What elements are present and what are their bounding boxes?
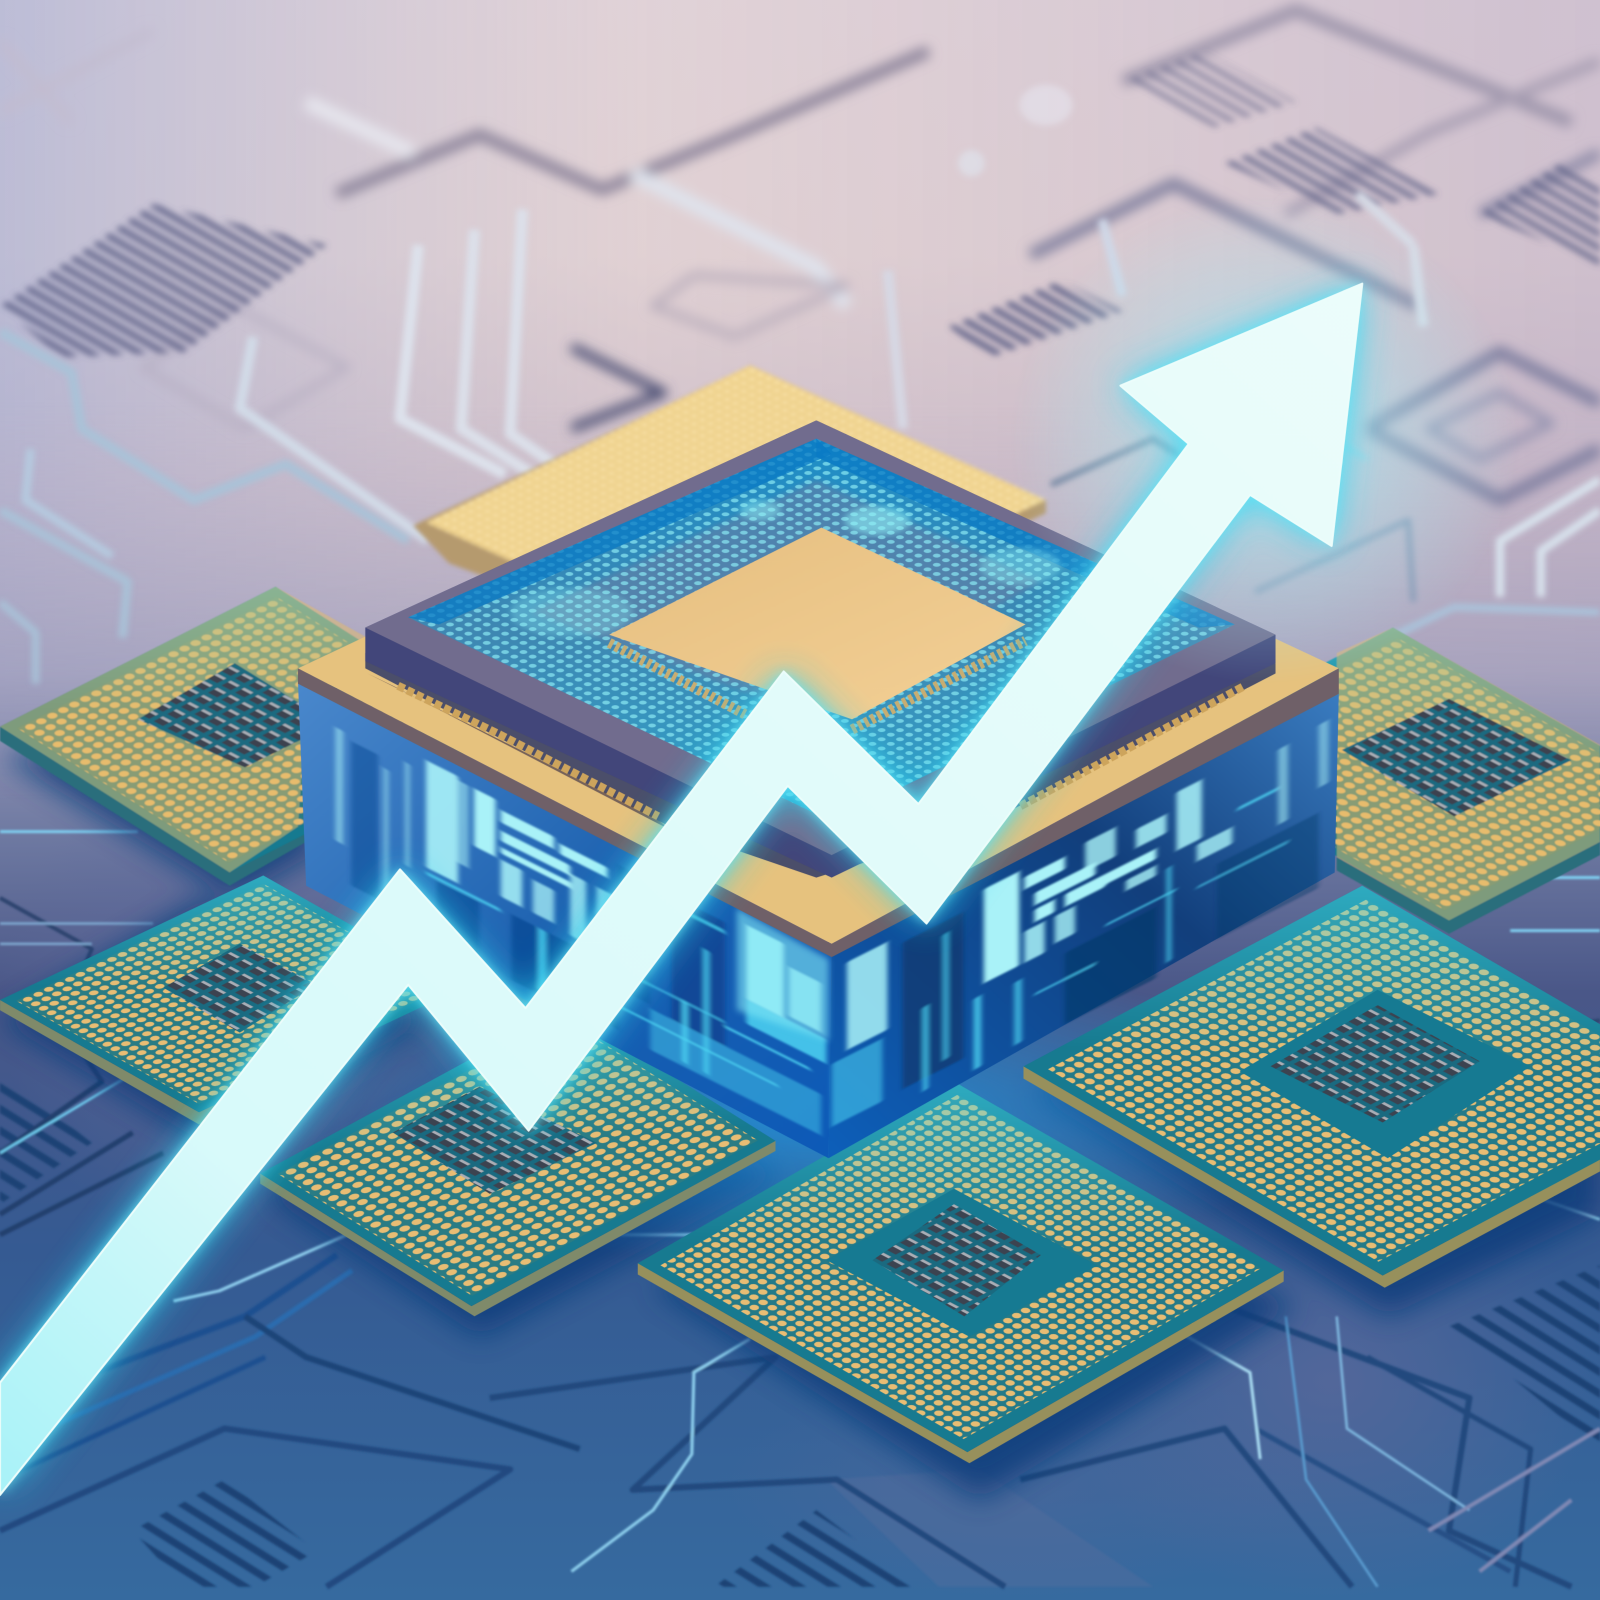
block: bright front corner (737, 908, 829, 1041)
block: gold pin rows (398, 686, 1245, 816)
chip: back gold chip (blurred) (413, 365, 1046, 663)
chip: front centre (638, 1082, 1284, 1463)
chip: upper left (0, 587, 505, 886)
front centre chip: centre components (827, 1189, 1097, 1337)
arrow: rising white trend line (0, 284, 1362, 1495)
chip: front left (260, 1008, 776, 1316)
block: gold plate (298, 423, 1339, 944)
front left chip: centre components (393, 1087, 597, 1194)
block: left wall with circuitry (298, 682, 832, 1158)
block: plate rim (298, 668, 1339, 957)
shadows beneath chips (0, 735, 1600, 1500)
middle left chip: centre components (163, 944, 316, 1033)
front right chip: centre components (1240, 990, 1531, 1158)
glow around arrow head (1010, 194, 1520, 684)
upper left chip: centre components (138, 663, 301, 767)
background traces: light upper lines (0, 194, 1600, 684)
background: striped contact pads (0, 51, 1600, 357)
block: glowing inner screen (408, 439, 1235, 821)
block: dark frame (365, 420, 1276, 878)
arrow: cyan glow (0, 284, 1362, 1495)
chip: front right (1023, 886, 1600, 1288)
block: central gold die (609, 528, 1026, 730)
block: right wall with circuitry (829, 694, 1339, 1158)
background traces: lower dark board (0, 832, 1600, 1587)
central stacked processor block (298, 420, 1339, 1158)
upper right chip: centre components (1342, 699, 1571, 816)
chip: upper right (1154, 628, 1600, 934)
glow under central block (286, 959, 1347, 1265)
chip: middle left (0, 876, 462, 1124)
block: dark recess with shadow along plate (365, 653, 1276, 878)
background traces: blurred upper board (0, 10, 1600, 500)
